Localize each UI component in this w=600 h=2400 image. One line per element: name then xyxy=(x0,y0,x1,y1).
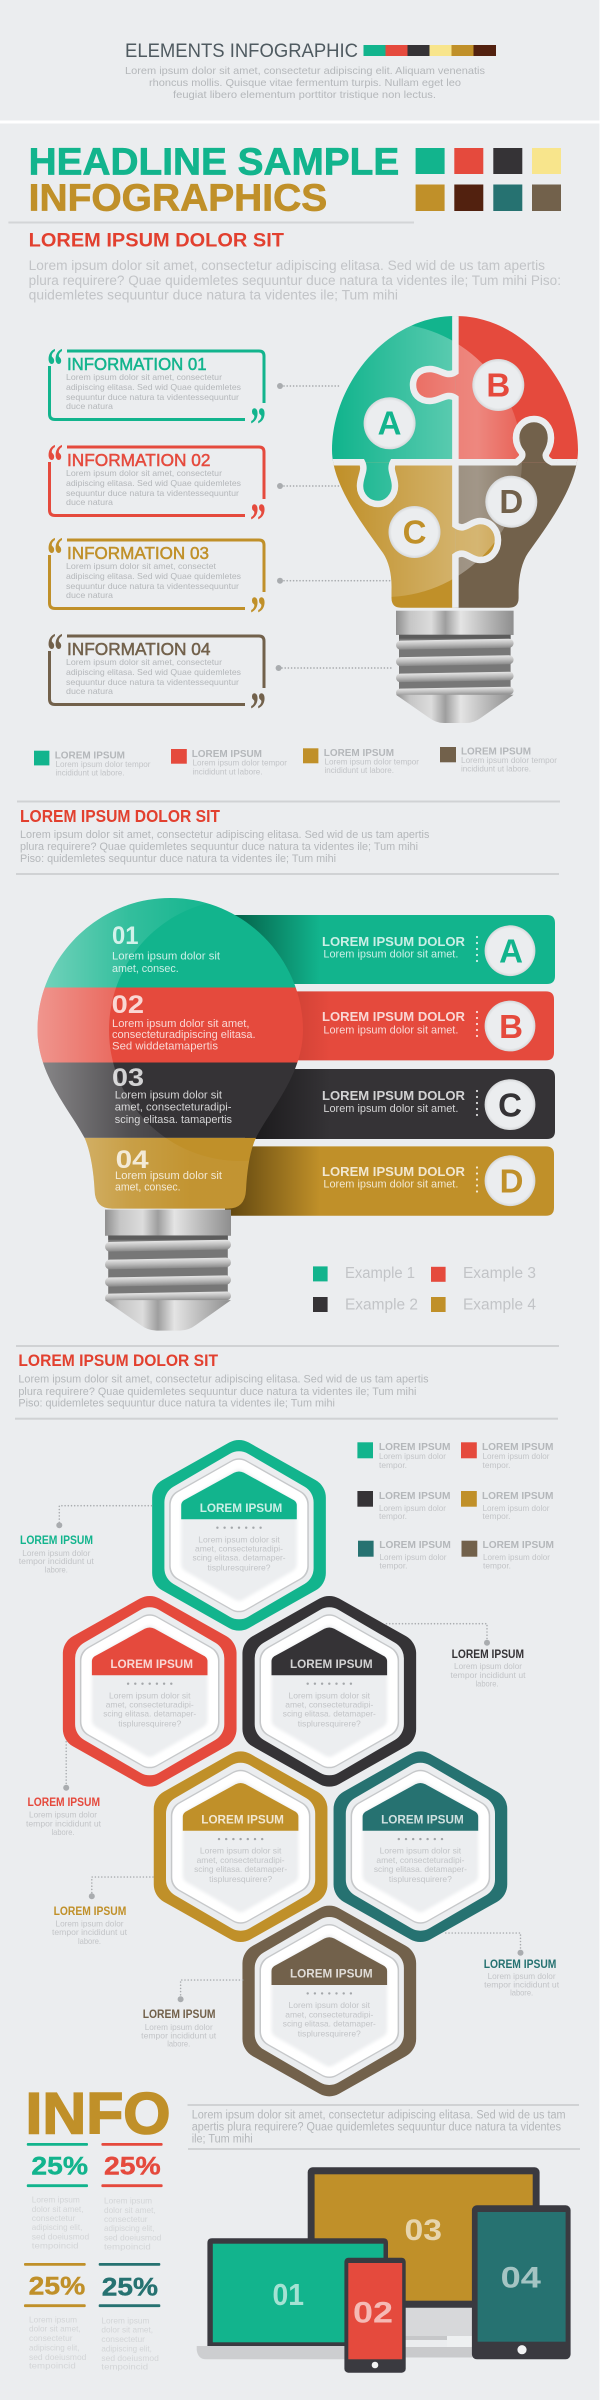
callout dark: Lorem ipsum dolor xyxy=(454,1661,522,1671)
hexagon brown: Lorem ipsum dolor sit xyxy=(289,2000,371,2010)
stat gold: dolor sit amet, xyxy=(29,2324,81,2334)
hexagon dark: scing elitasa. detamaper- xyxy=(283,1709,376,1719)
stat dark teal: tempoincid xyxy=(101,2362,148,2372)
hex legend item dark teal: tempor. xyxy=(380,1562,408,1571)
band 01 text: amet, consec. xyxy=(112,963,179,975)
callout teal: LOREM IPSUM xyxy=(20,1533,93,1547)
callout dark teal xyxy=(446,1933,560,1998)
hexagon dark xyxy=(262,1616,396,1767)
section intro 2: Lorem ipsum dolor sit amet, consectetur adipiscing elitasa. Sed wid de us tam apertis xyxy=(20,829,430,841)
band 02 text: consecteturadipiscing elitasa. xyxy=(112,1029,256,1041)
box body: Lorem ipsum dolor sit amet, consectetur xyxy=(66,372,222,382)
close quote: ” xyxy=(250,492,266,548)
stat red xyxy=(101,2143,163,2251)
badge B xyxy=(472,359,524,411)
callout gold: tempor incididunt ut xyxy=(52,1927,128,1937)
callout teal: tempor incididunt ut xyxy=(19,1556,94,1566)
callout dark teal: Lorem ipsum dolor xyxy=(488,1971,556,1981)
legend item 1 xyxy=(34,750,151,778)
callout red: tempor incididunt ut xyxy=(26,1819,102,1829)
tablet xyxy=(472,2205,571,2359)
box title: INFORMATION 02 xyxy=(67,450,210,470)
info box 01 xyxy=(47,337,266,452)
legend row under puzzle bulb xyxy=(34,746,557,778)
callout gold xyxy=(52,1877,153,1946)
box body: Lorem ipsum dolor sit amet, consectetur xyxy=(66,468,222,478)
phone xyxy=(344,2258,406,2373)
bulb glass bands xyxy=(38,898,303,1209)
legend item 1: LOREM IPSUM xyxy=(55,750,125,762)
ribbon C xyxy=(245,1069,555,1139)
band 04 text xyxy=(115,1146,222,1194)
info description: ile; Tum mihi xyxy=(192,2133,253,2145)
section intro 1: Lorem ipsum dolor sit amet, consectetur adipiscing elitasa. Sed wid de us tam apertis xyxy=(29,258,545,273)
phone: 02 xyxy=(353,2296,393,2329)
box title: INFORMATION 04 xyxy=(67,639,211,659)
box body xyxy=(66,468,241,507)
ribbon A: LOREM IPSUM DOLOR xyxy=(322,934,466,949)
headline line two: INFOGRAPHICS xyxy=(29,178,327,220)
legend item 3 xyxy=(303,747,419,775)
box body: Lorem ipsum dolor sit amet, consectet xyxy=(66,561,217,571)
band 03 text: 03 xyxy=(112,1064,144,1092)
callout brown xyxy=(141,1980,243,2049)
example legend: Example 1 xyxy=(345,1265,415,1282)
hex legend item dark: Lorem ipsum dolor xyxy=(379,1504,446,1513)
callout dark teal: LOREM IPSUM xyxy=(484,1957,556,1971)
box body: Lorem ipsum dolor sit amet, consectetur xyxy=(66,657,222,667)
stat red: sed doeiusmod xyxy=(104,2232,162,2242)
hexagon red: Lorem ipsum dolor sit xyxy=(109,1690,191,1700)
legend item 2: incididunt ut labore. xyxy=(192,768,262,776)
info description: apertis plura requirere? Quae quidemletes sequuntur duce natura ta videntes xyxy=(192,2121,561,2133)
stat red: 25% xyxy=(104,2153,161,2181)
section heading 2: LOREM IPSUM DOLOR SIT xyxy=(20,806,220,826)
open quote: “ xyxy=(47,433,63,489)
ribbon B: LOREM IPSUM DOLOR xyxy=(322,1009,466,1024)
open quote: “ xyxy=(47,622,63,678)
hexagon dark: LOREM IPSUM xyxy=(290,1657,373,1671)
box body: duce natura xyxy=(66,686,113,696)
header description: feugiat libero elementum porttitor tristique non lectus. xyxy=(173,89,436,101)
stat red: consectetur xyxy=(104,2214,148,2224)
box body: duce natura xyxy=(66,401,113,411)
headline line one: HEADLINE SAMPLE xyxy=(29,142,399,184)
badge D xyxy=(485,1155,535,1206)
hexagon teal: amet, consecteturadipi- xyxy=(195,1544,283,1554)
badge C: C xyxy=(403,514,426,550)
hexagon brown: tispluresquirere? xyxy=(298,2028,361,2038)
hexagon teal: tispluresquirere? xyxy=(208,1563,271,1573)
box body: duce natura xyxy=(66,590,113,600)
hexagon teal: scing elitasa. detamaper- xyxy=(192,1553,286,1563)
stat red: tempoincid xyxy=(104,2241,151,2251)
legend item 4: Lorem ipsum dolor tempor xyxy=(461,756,557,765)
ribbon A: Lorem ipsum dolor sit amet. xyxy=(323,948,458,960)
box body: sequuntur duce natura ta videntessequuntur xyxy=(66,488,239,498)
band 04 text: amet, consec. xyxy=(115,1182,181,1194)
info description: Lorem ipsum dolor sit amet, consectetur adipiscing elitasa. Sed wid de us tam xyxy=(192,2109,566,2121)
section heading 1: LOREM IPSUM DOLOR SIT xyxy=(29,230,284,252)
section intro 3: Lorem ipsum dolor sit amet, consectetur adipiscing elitasa. Sed wid de us tam apertis xyxy=(18,1374,429,1386)
hexagon gold: LOREM IPSUM xyxy=(201,1812,284,1826)
legend item 4: incididunt ut labore. xyxy=(461,765,531,774)
dotted connectors to puzzle bulb xyxy=(276,383,394,671)
box body: adipiscing elitasa. Sed wid Quae quidemletes xyxy=(66,571,241,581)
badge A xyxy=(364,397,416,449)
band 02 text: Lorem ipsum dolor sit amet, xyxy=(112,1018,250,1030)
badge C xyxy=(485,1079,535,1130)
header block xyxy=(125,41,496,101)
badge A: A xyxy=(378,404,402,442)
example legend: Example 4 xyxy=(463,1296,536,1313)
metal socket xyxy=(105,1210,231,1331)
band 03 text: scing elitasa. tamapertis xyxy=(115,1114,232,1126)
stat teal xyxy=(27,2143,89,2250)
hex legend item red xyxy=(461,1441,554,1470)
hexagon gold: amet, consecteturadipi- xyxy=(197,1855,285,1865)
stat dark teal: dolor sit amet, xyxy=(101,2325,153,2335)
callout teal xyxy=(19,1506,152,1575)
callout teal: Lorem ipsum dolor xyxy=(22,1548,90,1558)
band 04 text: 04 xyxy=(116,1146,149,1174)
badge B xyxy=(485,1001,535,1051)
stat teal: consectetur xyxy=(32,2213,76,2223)
box body xyxy=(66,657,241,696)
hexagon red: scing elitasa. detamaper- xyxy=(103,1709,196,1719)
callout dark: LOREM IPSUM xyxy=(452,1647,524,1661)
badge B: B xyxy=(486,366,510,404)
close quote: ” xyxy=(250,396,266,452)
section intro 2: plura requirere? Quae quidemletes sequuntur duce natura ta videntes ile; Tum mihi xyxy=(20,841,418,853)
section intro 2 xyxy=(20,829,430,865)
badge D: D xyxy=(499,483,523,520)
hexagon brown: LOREM IPSUM xyxy=(290,1967,373,1981)
palette squares xyxy=(416,148,561,211)
ribbon A xyxy=(230,915,555,984)
callout brown: LOREM IPSUM xyxy=(143,2007,216,2021)
hex legend item red: Lorem ipsum dolor xyxy=(482,1452,550,1461)
section intro 3 xyxy=(18,1374,429,1410)
box body: duce natura xyxy=(66,497,113,507)
legend item 2 xyxy=(171,748,287,776)
ribbon C: LOREM IPSUM DOLOR xyxy=(322,1088,466,1103)
hexagon gold: tispluresquirere? xyxy=(209,1874,272,1884)
hexagon dark teal: amet, consecteturadipi- xyxy=(376,1855,465,1865)
stat teal: dolor sit amet, xyxy=(32,2204,84,2214)
stat teal: adipiscing elit, xyxy=(32,2222,82,2232)
legend item 3: LOREM IPSUM xyxy=(324,747,394,759)
hexagon red: LOREM IPSUM xyxy=(110,1657,193,1671)
legend item 1: incididunt ut labore. xyxy=(56,768,124,778)
stat gold: Lorem ipsum xyxy=(29,2315,77,2325)
colour palette strip xyxy=(364,45,496,56)
stat red: adipiscing elit, xyxy=(104,2223,154,2233)
hex legend item gold: tempor. xyxy=(482,1512,510,1521)
legend item 3: Lorem ipsum dolor tempor xyxy=(324,758,419,767)
hexagon teal: LOREM IPSUM xyxy=(200,1501,282,1515)
box body xyxy=(66,561,241,600)
info description xyxy=(192,2109,566,2145)
hex legend item brown: tempor. xyxy=(483,1562,511,1571)
close quote: ” xyxy=(250,585,266,641)
hex legend item dark: tempor. xyxy=(379,1512,407,1521)
example legend: Example 2 xyxy=(345,1296,418,1313)
section intro 1 xyxy=(29,258,561,302)
hexagon dark: tispluresquirere? xyxy=(298,1719,361,1729)
hexagon dark teal xyxy=(354,1771,487,1922)
hex legend item dark: LOREM IPSUM xyxy=(379,1490,451,1502)
hexagon dark teal: LOREM IPSUM xyxy=(381,1812,464,1826)
hexagon teal: Lorem ipsum dolor sit xyxy=(198,1534,280,1544)
box body: sequuntur duce natura ta videntessequuntur xyxy=(66,677,239,687)
callout brown: Lorem ipsum dolor xyxy=(145,2022,213,2032)
band 01 text: Lorem ipsum dolor sit xyxy=(112,951,220,963)
ribbon B: Lorem ipsum dolor sit amet. xyxy=(323,1025,458,1037)
section heading 3: LOREM IPSUM DOLOR SIT xyxy=(18,1351,219,1370)
laptop: 01 xyxy=(272,2277,304,2312)
section intro 3: plura requirere? Quae quidemletes sequuntur duce natura ta videntes ile; Tum mihi xyxy=(18,1386,416,1398)
stat gold: 25% xyxy=(29,2273,85,2301)
callout brown: labore. xyxy=(167,2039,190,2049)
stat dark teal xyxy=(99,2263,160,2372)
info box 04 xyxy=(47,622,266,737)
section intro 1: plura requirere? Quae quidemletes sequuntur duce natura ta videntes ile; Tum mihi Piso: xyxy=(29,273,561,288)
ribbon D: Lorem ipsum dolor sit amet. xyxy=(323,1178,458,1190)
hexagon dark teal: scing elitasa. detamaper- xyxy=(374,1864,467,1874)
example legend: Example 3 xyxy=(463,1265,536,1282)
band 03 text: Lorem ipsum dolor sit xyxy=(115,1090,222,1102)
hex legend item gold xyxy=(461,1490,554,1521)
badge D: D xyxy=(500,1162,523,1200)
hexagon brown: amet, consecteturadipi- xyxy=(285,2009,373,2019)
hex legend item dark teal: LOREM IPSUM xyxy=(379,1539,451,1551)
ribbon D xyxy=(225,1146,554,1216)
hexagon dark: amet, consecteturadipi- xyxy=(285,1700,373,1710)
callout dark: labore. xyxy=(476,1679,498,1689)
band 02 text: 02 xyxy=(112,991,144,1019)
badge A: A xyxy=(499,932,523,970)
header description xyxy=(125,65,485,101)
device group xyxy=(197,2167,571,2373)
callout red xyxy=(26,1742,102,1837)
band 03 text: amet, consecteturadipi- xyxy=(115,1102,232,1114)
section intro 3: Piso: quidemletes sequuntur duce natura ta videntes ile; Tum mihi xyxy=(18,1398,335,1410)
header description: Lorem ipsum dolor sit amet, consectetur adipiscing elit. Aliquam venenatis xyxy=(125,65,485,77)
hexagon teal xyxy=(172,1460,306,1611)
hexagon brown: scing elitasa. detamaper- xyxy=(283,2018,376,2028)
hex legend item brown xyxy=(462,1539,554,1571)
hexagon dark teal: Lorem ipsum dolor sit xyxy=(380,1846,462,1856)
header description: rhoncus mollis. Quisque vitae fermentum turpis. Nullam eget leo xyxy=(149,77,461,89)
box body: sequuntur duce natura ta videntessequuntur xyxy=(66,392,239,402)
info box 02 xyxy=(47,433,266,548)
box title: INFORMATION 01 xyxy=(67,354,207,374)
banded light bulb xyxy=(38,898,303,1331)
ribbon D: LOREM IPSUM DOLOR xyxy=(322,1164,466,1179)
hex legend item teal: Lorem ipsum dolor xyxy=(379,1452,446,1461)
open quote: “ xyxy=(47,337,63,393)
stat dark teal: Lorem ipsum xyxy=(101,2316,149,2326)
stat gold: tempoincid xyxy=(29,2361,76,2371)
hex legend item teal: tempor. xyxy=(379,1461,407,1470)
hexagon legend xyxy=(357,1441,554,1571)
callout dark: tempor incididunt ut xyxy=(450,1670,526,1680)
hexagon gold xyxy=(174,1771,307,1922)
title: elements infographic: ELEMENTS INFOGRAPHIC xyxy=(125,41,358,62)
badge A xyxy=(485,925,535,976)
info box 03 xyxy=(47,526,266,641)
legend item 4 xyxy=(440,746,557,774)
tablet: 04 xyxy=(501,2261,541,2294)
INFO heading: INFO xyxy=(26,2082,170,2146)
box body: adipiscing elitasa. Sed wid Quae quidemletes xyxy=(66,382,241,392)
hex legend item gold: Lorem ipsum dolor xyxy=(482,1504,550,1513)
band 03 text xyxy=(112,1064,232,1126)
stat teal: tempoincid xyxy=(32,2240,79,2250)
callout dark teal: tempor incididunt ut xyxy=(484,1979,560,1989)
hex legend item dark teal xyxy=(358,1539,451,1571)
hex legend item teal xyxy=(357,1441,451,1470)
stat gold: sed doeiusmod xyxy=(29,2352,87,2362)
section intro 2: Piso: quidemletes sequuntur duce natura ta videntes ile; Tum mihi xyxy=(20,853,336,865)
legend item 2: Lorem ipsum dolor tempor xyxy=(192,758,287,768)
box body: adipiscing elitasa. Sed wid Quae quidemletes xyxy=(66,667,241,677)
badge C xyxy=(388,506,440,558)
callout brown: tempor incididunt ut xyxy=(141,2030,217,2040)
stat dark teal: sed doeiusmod xyxy=(101,2353,159,2363)
band 02 text: Sed widdetamapertis xyxy=(112,1041,219,1053)
band 04 text: Lorem ipsum dolor sit xyxy=(115,1170,222,1182)
ribbon B xyxy=(270,991,554,1060)
hexagon brown xyxy=(262,1926,396,2076)
hex legend item teal: LOREM IPSUM xyxy=(379,1441,451,1453)
example legend xyxy=(313,1265,536,1313)
stat gold: adipiscing elit, xyxy=(29,2343,80,2353)
hexagon red: amet, consecteturadipi- xyxy=(106,1700,194,1710)
hex legend item gold: LOREM IPSUM xyxy=(482,1490,554,1502)
box title: INFORMATION 03 xyxy=(67,543,209,563)
hex legend item brown: LOREM IPSUM xyxy=(482,1539,554,1551)
band 02 text xyxy=(112,991,256,1053)
open quote: “ xyxy=(47,526,63,582)
legend item 1: Lorem ipsum dolor tempor xyxy=(56,760,151,769)
band 01 text xyxy=(112,922,220,975)
hexagon dark teal: tispluresquirere? xyxy=(389,1874,452,1884)
callout red: LOREM IPSUM xyxy=(28,1795,100,1809)
section intro 1: quidemletes sequuntur duce natura ta videntes ile; Tum mihi xyxy=(29,288,398,302)
hex legend item brown: Lorem ipsum dolor xyxy=(483,1553,550,1562)
hex legend item dark xyxy=(357,1490,451,1521)
hexagon red: tispluresquirere? xyxy=(118,1719,181,1729)
hexagon gold: Lorem ipsum dolor sit xyxy=(200,1846,282,1856)
monitor xyxy=(308,2167,540,2358)
box body: adipiscing elitasa. Sed wid Quae quidemletes xyxy=(66,478,241,488)
headline block xyxy=(29,142,399,220)
callout red: labore. xyxy=(52,1827,74,1837)
hex legend item dark teal: Lorem ipsum dolor xyxy=(380,1553,447,1562)
ribbon C: Lorem ipsum dolor sit amet. xyxy=(323,1103,458,1115)
hexagon red xyxy=(83,1616,217,1767)
stat red: dolor sit amet, xyxy=(104,2205,156,2215)
box body: sequuntur duce natura ta videntessequuntur xyxy=(66,581,239,591)
metal socket xyxy=(396,611,514,723)
stat teal: sed doeiusmod xyxy=(32,2231,89,2241)
stat dark teal: adipiscing elit, xyxy=(101,2344,152,2354)
callout teal: labore. xyxy=(45,1565,68,1575)
hexagon gold: scing elitasa. detamaper- xyxy=(194,1864,287,1874)
hexagon dark: Lorem ipsum dolor sit xyxy=(289,1690,371,1700)
callout gold: LOREM IPSUM xyxy=(54,1904,126,1918)
close quote: ” xyxy=(250,681,266,737)
legend item 3: incididunt ut labore. xyxy=(324,766,394,775)
legend item 2: LOREM IPSUM xyxy=(192,748,262,760)
stat red: Lorem ipsum xyxy=(104,2196,152,2206)
monitor: 03 xyxy=(404,2214,442,2247)
hex legend item red: tempor. xyxy=(482,1461,510,1470)
band 01 text: 01 xyxy=(112,922,139,950)
callout red: Lorem ipsum dolor xyxy=(29,1810,97,1820)
stat dark teal: consectetur xyxy=(101,2334,145,2344)
badge B: B xyxy=(499,1008,523,1045)
callout gold: labore. xyxy=(78,1936,101,1946)
callout dark teal: labore. xyxy=(510,1988,533,1998)
badge C: C xyxy=(498,1086,522,1123)
callout dark xyxy=(386,1624,526,1689)
laptop xyxy=(197,2238,400,2359)
puzzle light bulb xyxy=(332,316,578,723)
stat teal: Lorem ipsum xyxy=(32,2195,80,2205)
stat dark teal: 25% xyxy=(102,2274,158,2302)
hex legend item red: LOREM IPSUM xyxy=(482,1441,554,1453)
legend item 4: LOREM IPSUM xyxy=(461,746,531,758)
puzzle glass xyxy=(332,316,578,608)
badge D xyxy=(485,476,537,528)
stat teal: 25% xyxy=(31,2153,88,2181)
stat gold xyxy=(24,2263,87,2371)
stat gold: consectetur xyxy=(29,2333,73,2343)
callout gold: Lorem ipsum dolor xyxy=(56,1919,124,1929)
box body xyxy=(66,372,241,411)
